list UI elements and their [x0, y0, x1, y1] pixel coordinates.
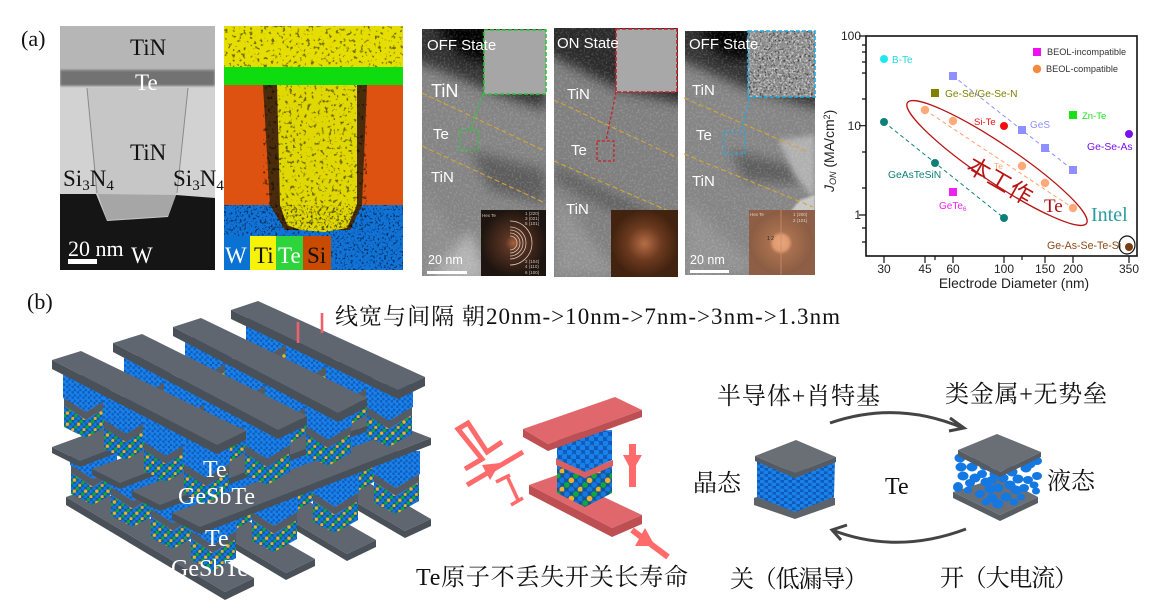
y tick labels: 100	[841, 29, 861, 43]
highlight ellipse	[897, 87, 1097, 239]
Te slab	[556, 458, 613, 478]
annotation: Te: Te	[1044, 196, 1063, 217]
series: Zn-Te	[1069, 111, 1106, 122]
series: Ge-As-Se-Te-Si	[1047, 236, 1135, 254]
label: Te upper: Te	[203, 457, 227, 483]
caption: Te lifetime: Te原子不丢失开关长寿命	[416, 564, 688, 591]
label: TiN lower: TiN	[431, 169, 454, 186]
legend: Si: Si	[307, 243, 326, 268]
series: Ge-Se-As	[1087, 130, 1133, 153]
interface dashes	[554, 100, 678, 215]
label: W: W	[131, 243, 153, 268]
Te atoms	[557, 430, 612, 472]
middle electrodes	[52, 362, 431, 534]
inset: diffuse FFT	[611, 210, 678, 277]
label: TiN: TiN	[567, 86, 590, 103]
label: Si3N4 left: 3	[82, 178, 90, 194]
legend: BEOL-compatible	[1046, 64, 1118, 74]
series: Te this work: Te	[994, 161, 1003, 171]
marker: green box	[460, 94, 483, 150]
x axis title: Electrode Diameter (nm)	[939, 276, 1089, 291]
series: Ge-Se-As: Ge-Se-As	[1087, 142, 1133, 153]
label: on high current: 开（大电流）	[940, 565, 1078, 592]
label: Si3N4 left: N	[90, 166, 107, 191]
series: Ge-Se/Ge-Se-N: Ge-Se/Ge-Se-N	[945, 89, 1017, 100]
inset: FFT halo: 1 (200)	[793, 212, 808, 217]
label: GeSbTe upper: GeSbTe	[178, 484, 255, 510]
series: Si-Te: Si-Te	[974, 117, 996, 128]
x tick labels	[877, 262, 1139, 276]
panel: EDS element map	[224, 26, 403, 270]
label: metal-like no barrier: 类金属+无势垒	[945, 381, 1107, 408]
inset: diffraction rings: 6 (100)	[525, 270, 540, 275]
interface dashes	[684, 98, 813, 207]
series: Zn-Te: Zn-Te	[1082, 111, 1106, 122]
label: Te lower: Te	[205, 526, 229, 552]
label: TiN lower: TiN	[566, 201, 589, 218]
top electrodes	[52, 301, 425, 454]
pitch marker ticks	[298, 313, 322, 343]
bottom electrodes	[66, 430, 431, 600]
inset: lattice zoom green	[484, 30, 546, 94]
series: Si-Te	[974, 117, 1008, 130]
legend: Si	[303, 236, 331, 270]
series: GeTe6: GeTe	[939, 201, 963, 212]
x tick labels: 100	[994, 262, 1014, 276]
legend: W: W	[225, 243, 247, 268]
heading: ON State: ON State	[557, 35, 619, 52]
panel label (a): (a)	[21, 26, 45, 51]
label: Si3N4 right: 3	[192, 178, 200, 194]
series: B-Te: B-Te	[892, 55, 913, 66]
inset: diffraction rings: 4 (110)	[525, 264, 539, 269]
legend: Te	[276, 236, 303, 270]
panel: OFF state TEM 2	[684, 30, 816, 275]
heading: OFF State: OFF State	[689, 36, 758, 53]
series: Te this work	[921, 106, 1077, 212]
trend dashes	[884, 76, 1073, 218]
marker: red box	[597, 92, 616, 161]
legend: Ti	[250, 236, 276, 270]
scale: 20 nm: 20 nm	[428, 253, 463, 267]
inset: amorphous zoom cyan	[748, 31, 815, 97]
inset: FFT halo: Hex Te	[750, 212, 764, 217]
label: Si3N4 left: Si	[63, 166, 82, 191]
annotation: Intel: Intel	[1091, 204, 1128, 226]
label: off low leakage: 关（低漏导）	[730, 566, 868, 593]
label: Te: Te	[571, 142, 587, 159]
interface dashes	[422, 93, 543, 202]
label: TiN lower: TiN	[692, 173, 715, 190]
inset: lattice zoom red	[616, 29, 677, 92]
arrow: inlet symbol	[458, 423, 523, 505]
label: Te: Te	[433, 126, 449, 143]
series: GeAsTeSiN: GeAsTeSiN	[888, 170, 941, 181]
label: Si3N4 right: Si	[173, 166, 192, 191]
scale bar	[68, 259, 97, 264]
arrow: current down	[623, 444, 642, 487]
heading: OFF State: OFF State	[427, 37, 496, 54]
x tick labels: 200	[1063, 262, 1083, 276]
series: GeS: GeS	[1030, 120, 1050, 131]
axes frame	[866, 36, 1137, 256]
heading: line width and spacing: 线宽与间隔 朝20nm->10nm->7nm->3nm->1.3nm	[335, 304, 840, 329]
panel: OFF state TEM 1	[422, 29, 547, 276]
chart: J_ON vs electrode diameter	[821, 29, 1139, 291]
label: liquid: 液态	[1047, 468, 1096, 495]
label: TiN: TiN	[431, 81, 458, 101]
single cell device	[523, 397, 642, 537]
label: Te: Te	[135, 70, 158, 95]
label: Si3N4 right: 4	[216, 178, 224, 194]
panel: ON state TEM	[554, 28, 678, 277]
top electrode	[523, 397, 642, 451]
cube: crystalline Te	[754, 440, 836, 519]
bottom electrode	[529, 475, 642, 537]
series: B-Te	[880, 55, 913, 66]
annotation: 本工作: 本工作	[962, 152, 1038, 210]
series: GeAsTeSiN	[880, 118, 1008, 222]
series: GeS	[949, 72, 1077, 174]
scale label: 20 nm	[68, 236, 124, 261]
3D crossbar array	[52, 301, 431, 600]
legend: Ti: Ti	[254, 243, 274, 268]
cube: liquid Te	[953, 434, 1042, 521]
scale: 20 nm: 20 nm	[690, 253, 725, 267]
label: crystalline: 晶态	[693, 470, 742, 497]
inset: FFT halo: 1 2	[767, 236, 774, 242]
inset: diffraction rings: 2 (104)	[525, 259, 540, 264]
y axis title: (MA/cm	[821, 119, 837, 172]
y axis title: ON	[828, 171, 838, 185]
inset: FFT halo	[749, 210, 815, 275]
y axis title: 2	[822, 114, 832, 119]
label: TiN top: TiN	[130, 35, 167, 60]
series: GeTe6	[939, 188, 967, 213]
upper memory cells	[63, 318, 413, 504]
label: TiN: TiN	[692, 82, 715, 99]
inset: FFT halo: 2 (101)	[793, 218, 808, 223]
y axis title: J	[821, 184, 837, 193]
lower memory cells	[70, 385, 420, 571]
inset: diffraction rings: 3 (021)	[525, 216, 540, 221]
scale: 20 nm	[427, 253, 467, 274]
x tick labels: 45	[918, 262, 932, 276]
y tick labels: 1	[854, 208, 861, 222]
x tick labels: 150	[1035, 262, 1055, 276]
x tick labels: 30	[877, 262, 891, 276]
y tick labels: 10	[848, 119, 861, 133]
label: semiconductor plus Schottky: 半导体+肖特基	[717, 383, 880, 410]
series: GeTe6: 6	[963, 206, 967, 213]
label: GeSbTe lower: GeSbTe	[171, 556, 248, 582]
panel label (b): (b)	[27, 289, 53, 314]
label: Te: Te	[696, 127, 712, 144]
scale: 20 nm	[690, 253, 729, 273]
label: Te center: Te	[885, 474, 909, 500]
arrow: reset transition	[832, 525, 966, 542]
legend	[1033, 47, 1126, 74]
label: Si3N4 right: N	[200, 166, 217, 191]
legend: W	[224, 236, 250, 270]
series: Ge-As-Se-Te-Si: Ge-As-Se-Te-Si	[1047, 240, 1121, 252]
tick marks	[859, 36, 1129, 263]
x tick labels: 350	[1119, 262, 1139, 276]
inset: diffraction rings: 5 (101)	[525, 221, 540, 226]
arrow: set transition	[830, 413, 964, 431]
y tick labels	[841, 29, 861, 222]
panel: TEM cross-section	[60, 26, 215, 270]
GeSbTe layer	[557, 464, 612, 507]
inset: diffraction rings: 1 (220)	[525, 211, 540, 216]
marker: cyan box	[724, 97, 750, 154]
inset: diffraction rings	[481, 210, 546, 276]
legend: BEOL-incompatible	[1047, 47, 1126, 57]
arrow: current out	[632, 528, 668, 557]
label: TiN plug: TiN	[130, 140, 167, 165]
label: Si3N4 left: 4	[106, 178, 114, 194]
inset: diffraction rings: Hex Te	[482, 213, 496, 218]
x tick labels: 60	[946, 262, 960, 276]
y axis title: )	[821, 110, 837, 114]
legend: Te: Te	[278, 243, 301, 268]
